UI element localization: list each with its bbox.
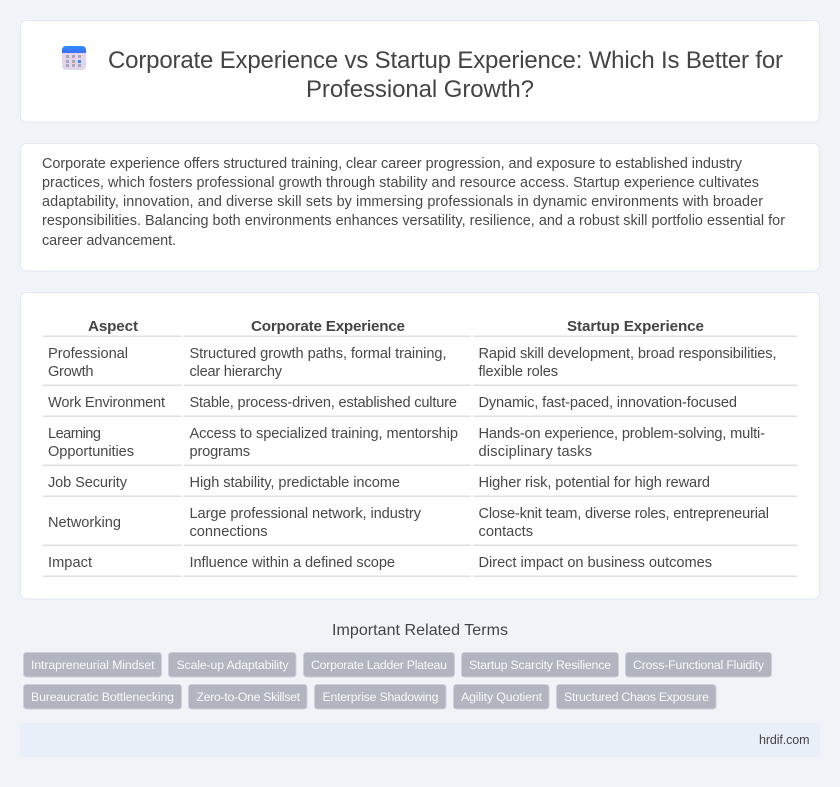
row: professional growth: flexible roles bbox=[478, 364, 558, 380]
row: learning opportunities: Hands-on experience, problem-solving, multi- bbox=[478, 426, 765, 442]
row: professional growth: Structured growth paths, formal training, bbox=[190, 346, 446, 362]
text block: summary paragraph: responsibilities. Balancing both environments enhances versatility, resilience, and a robust skill portfolio essential for bbox=[42, 213, 785, 229]
table header bbox=[88, 318, 704, 335]
row: work environment: Stable, process-driven, established culture bbox=[190, 395, 457, 411]
text block: summary paragraph: career advancement. bbox=[42, 233, 176, 249]
row: networking: contacts bbox=[478, 524, 533, 540]
title: Corporate Experience vs Startup Experience: Which Is Better for bbox=[108, 47, 783, 74]
row: job security: Job Security bbox=[48, 475, 128, 491]
row: networking bbox=[48, 506, 769, 540]
tags: related terms: Structured Chaos Exposure bbox=[564, 690, 709, 704]
row: professional growth: Professional bbox=[48, 346, 128, 362]
text block: summary paragraph: adaptability, innovation, and diverse skill sets by immersing professionals in dynamic environments with broader bbox=[42, 194, 763, 210]
tags: related terms: Bureaucratic Bottlenecking bbox=[31, 690, 174, 704]
row: work environment: Dynamic, fast-paced, innovation-focused bbox=[478, 395, 737, 411]
row: learning opportunities: Access to specialized training, mentorship bbox=[190, 426, 458, 442]
title: Professional Growth? bbox=[306, 76, 534, 103]
table header: Corporate Experience bbox=[251, 318, 405, 335]
row: professional growth: Rapid skill development, broad responsibilities, bbox=[478, 346, 776, 362]
tags: related terms: Corporate Ladder Plateau bbox=[311, 658, 447, 672]
row: job security: High stability, predictable income bbox=[190, 475, 400, 491]
row: work environment: Work Environment bbox=[48, 395, 165, 411]
tags: related terms: Intrapreneurial Mindset bbox=[31, 658, 155, 672]
row: professional growth: Growth bbox=[48, 364, 94, 380]
text block: summary paragraph: practices, which fosters professional growth through stability and resource access. Startup experience cultivates bbox=[42, 175, 759, 191]
row: networking: Close-knit team, diverse roles, entrepreneurial bbox=[478, 506, 769, 522]
row: job security bbox=[48, 475, 710, 491]
tags: related terms: Enterprise Shadowing bbox=[322, 690, 439, 704]
row: professional growth bbox=[48, 346, 776, 380]
title bbox=[108, 47, 783, 103]
footer: hrdif.com bbox=[759, 733, 810, 747]
tags: related terms: Agility Quotient bbox=[461, 690, 543, 704]
row: impact: Impact bbox=[48, 555, 92, 571]
panel: comparison table bbox=[20, 292, 820, 599]
tags: related terms: Scale-up Adaptability bbox=[176, 658, 289, 672]
footer bbox=[20, 723, 820, 757]
row: learning opportunities: Learning bbox=[48, 426, 101, 442]
icon: calendar bbox=[62, 46, 86, 70]
tags: related terms: Startup Scarcity Resilience bbox=[469, 658, 611, 672]
text block: summary paragraph: Corporate experience offers structured training, clear career progression, and exposure to established industry bbox=[42, 156, 743, 172]
row: impact: Direct impact on business outcomes bbox=[478, 555, 712, 571]
tags: related terms: Zero-to-One Skillset bbox=[196, 690, 301, 704]
row: networking: Networking bbox=[48, 515, 121, 531]
panel: summary bbox=[20, 144, 820, 271]
row: work environment bbox=[48, 395, 737, 411]
row: impact bbox=[48, 555, 712, 571]
row: professional growth: clear hierarchy bbox=[190, 364, 283, 380]
table header: Aspect bbox=[88, 318, 138, 335]
text block: summary paragraph bbox=[42, 156, 785, 249]
row: learning opportunities bbox=[48, 426, 765, 460]
tags: related terms bbox=[24, 652, 772, 709]
table header: Startup Experience bbox=[567, 318, 704, 335]
row: job security: Higher risk, potential for high reward bbox=[478, 475, 710, 491]
panel: title card bbox=[20, 20, 820, 122]
row: networking: Large professional network, industry bbox=[190, 506, 422, 522]
row: impact: Influence within a defined scope bbox=[190, 555, 395, 571]
row: learning opportunities: disciplinary tasks bbox=[478, 444, 592, 460]
tags: related terms: Cross-Functional Fluidity bbox=[633, 658, 765, 672]
heading: related terms: Important Related Terms bbox=[332, 622, 508, 639]
row: networking: connections bbox=[190, 524, 268, 540]
row: learning opportunities: Opportunities bbox=[48, 444, 134, 460]
row: learning opportunities: programs bbox=[190, 444, 250, 460]
